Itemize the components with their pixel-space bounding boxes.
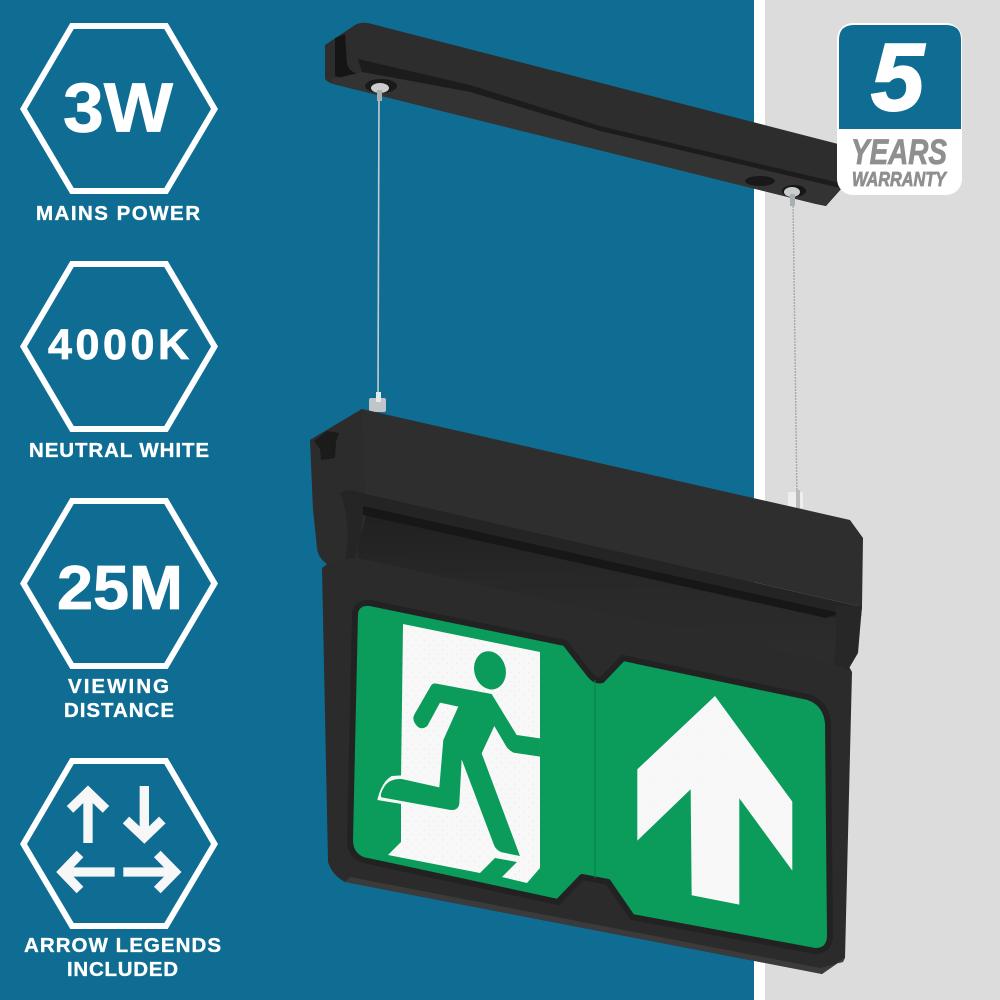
end cap hinge block bbox=[340, 490, 364, 560]
right end cap bbox=[834, 606, 862, 670]
spec: 4000K neutral white bbox=[24, 264, 214, 462]
bracket body bbox=[325, 23, 842, 206]
suspension wire: left bbox=[369, 92, 386, 412]
icon: hexagon 4000K bbox=[24, 264, 214, 429]
bracket lower shadow groove bbox=[358, 59, 840, 188]
badge card bbox=[837, 23, 962, 195]
bracket end slot bbox=[335, 34, 362, 80]
green face bezel and panel bbox=[350, 603, 830, 951]
badge blue header bbox=[839, 25, 961, 129]
foot outline bbox=[377, 775, 402, 804]
background: white divider strip bbox=[754, 0, 765, 1000]
panel bottom edge bbox=[345, 877, 845, 974]
suspension wire: right bbox=[788, 200, 803, 510]
label: viewing distance: VIEWING bbox=[68, 675, 169, 698]
mount: left bolt bbox=[365, 79, 397, 101]
value: 4000K: 4000K bbox=[48, 321, 189, 369]
icon: hexagon 25M bbox=[24, 501, 214, 666]
mount: right bolt bbox=[745, 176, 806, 206]
body bbox=[381, 683, 540, 856]
rail groove line bbox=[363, 506, 840, 618]
exit sign luminaire bbox=[310, 409, 863, 974]
icon: hexagon 3W bbox=[24, 26, 214, 191]
end cap clip detail bbox=[314, 431, 339, 460]
spec: arrow legends included bbox=[24, 761, 221, 981]
label: arrow legends included: INCLUDED bbox=[67, 958, 178, 981]
up arrow pictogram bbox=[637, 696, 792, 905]
icon: hexagon arrows bbox=[24, 761, 214, 926]
ceiling mounting bracket bbox=[325, 23, 842, 206]
label: arrow legends included: ARROW LEGENDS bbox=[24, 934, 221, 957]
panel hinge cylinder bbox=[358, 512, 842, 664]
background: blue panel bbox=[0, 0, 754, 1000]
running man pictogram bbox=[377, 648, 540, 856]
housing top box bbox=[310, 409, 863, 607]
panel centre seam bbox=[594, 680, 596, 878]
spec: 3W mains power bbox=[24, 26, 214, 225]
value: 3W: 3W bbox=[63, 68, 173, 146]
label: viewing distance: DISTANCE bbox=[64, 699, 174, 722]
rail shadow band bbox=[350, 490, 862, 617]
label: neutral white: NEUTRAL WHITE bbox=[29, 439, 209, 462]
bracket lower face bbox=[330, 72, 840, 206]
icon: four direction arrows bbox=[63, 786, 175, 890]
spec: 25M viewing distance bbox=[24, 501, 214, 722]
badge years: YEARS bbox=[851, 133, 947, 172]
head bbox=[470, 648, 510, 693]
left end cap bbox=[310, 409, 366, 564]
sign panel body bbox=[322, 545, 852, 974]
background: grey panel bbox=[765, 0, 1000, 1000]
warranty badge bbox=[837, 23, 962, 195]
badge warranty: WARRANTY bbox=[852, 169, 947, 191]
white door of running man pictogram bbox=[388, 624, 540, 883]
badge number: 5 bbox=[871, 24, 926, 131]
value: 25M: 25M bbox=[57, 554, 183, 623]
label: mains power: MAINS POWER bbox=[36, 202, 200, 225]
